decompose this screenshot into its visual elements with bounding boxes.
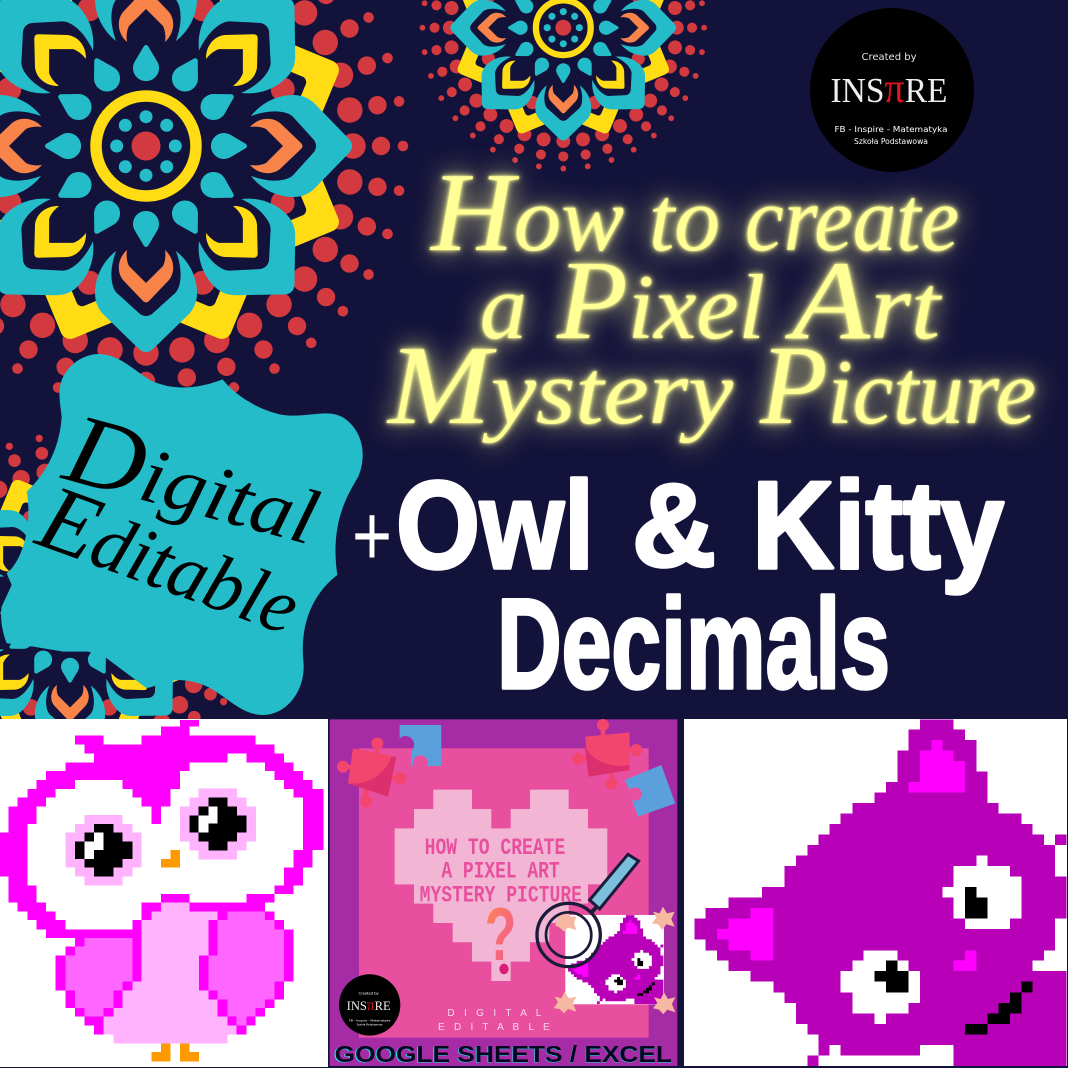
panel: kitty xyxy=(684,719,1067,1066)
neon title: to xyxy=(649,168,720,270)
heading: Owl and Kitty: + xyxy=(352,488,392,584)
mini logo xyxy=(339,974,400,1036)
heading: Decimals: Decimals xyxy=(497,573,890,716)
puzzle piece: red left xyxy=(337,737,407,808)
badge text: Digital: Digital xyxy=(52,391,332,566)
pixel heart xyxy=(395,790,607,981)
logo badge: FB - Inspire - Matematyka xyxy=(834,125,948,134)
mini logo: Szkoła Podstawowa xyxy=(357,1022,383,1026)
small mandala top centre xyxy=(420,0,707,171)
badge text: Editable: Editable xyxy=(24,464,315,655)
heading: Owl and Kitty xyxy=(352,457,1004,595)
neon title xyxy=(386,151,1036,448)
teal badge with script text xyxy=(1,354,363,715)
cover title: HOW TO CREATE xyxy=(425,836,565,862)
puzzle piece: blue right xyxy=(625,765,675,817)
neon title: create xyxy=(745,168,959,270)
cover title: A PIXEL ART xyxy=(441,860,560,886)
heading: Owl and Kitty: Kitty xyxy=(752,457,1004,595)
cover label: digital editable: E D I T A B L E xyxy=(438,1022,550,1033)
question mark: ? xyxy=(485,892,516,976)
neon title: a xyxy=(480,256,527,358)
mini logo: FB - Inspire - Matematyka xyxy=(349,1018,391,1022)
neon title: Pixel xyxy=(556,239,765,363)
panel: owl xyxy=(0,719,328,1067)
question mark xyxy=(485,892,516,976)
panel: tutorial cover xyxy=(330,719,677,1068)
cover footer: google sheets / excel: GOOGLE SHEETS / EXCEL xyxy=(335,1041,672,1067)
cover title: MYSTERY PICTURE xyxy=(420,884,582,910)
neon title: Picture xyxy=(759,324,1036,448)
cover footer: google sheets / excel: GOOGLE SHEETS / EXCEL xyxy=(333,1042,672,1068)
cover title xyxy=(420,836,582,910)
magnifying glass xyxy=(537,854,639,967)
mini logo: Created by xyxy=(359,991,380,995)
mini logo: INSπRE xyxy=(347,997,391,1014)
cover label: digital editable: D I G I T A L xyxy=(447,1008,542,1019)
logo badge xyxy=(810,8,974,172)
neon title: Mystery xyxy=(386,324,733,448)
puzzle piece: blue left xyxy=(400,725,441,766)
heading: Owl and Kitty: Owl xyxy=(396,457,594,595)
heading: Owl and Kitty: & xyxy=(632,460,716,592)
flowers xyxy=(554,907,675,1014)
neon title: Art xyxy=(784,239,943,363)
partial mandala behind badge xyxy=(0,432,251,794)
logo badge: Szkoła Podstawowa xyxy=(854,137,928,146)
logo badge: INSπRE xyxy=(830,66,948,112)
mini kitty picture xyxy=(565,915,664,1004)
large mandala top left xyxy=(0,0,408,408)
neon title: How xyxy=(429,151,624,275)
puzzle piece: red right xyxy=(572,719,642,789)
cover label: digital editable xyxy=(438,1008,550,1033)
logo badge: Created by xyxy=(861,52,917,63)
